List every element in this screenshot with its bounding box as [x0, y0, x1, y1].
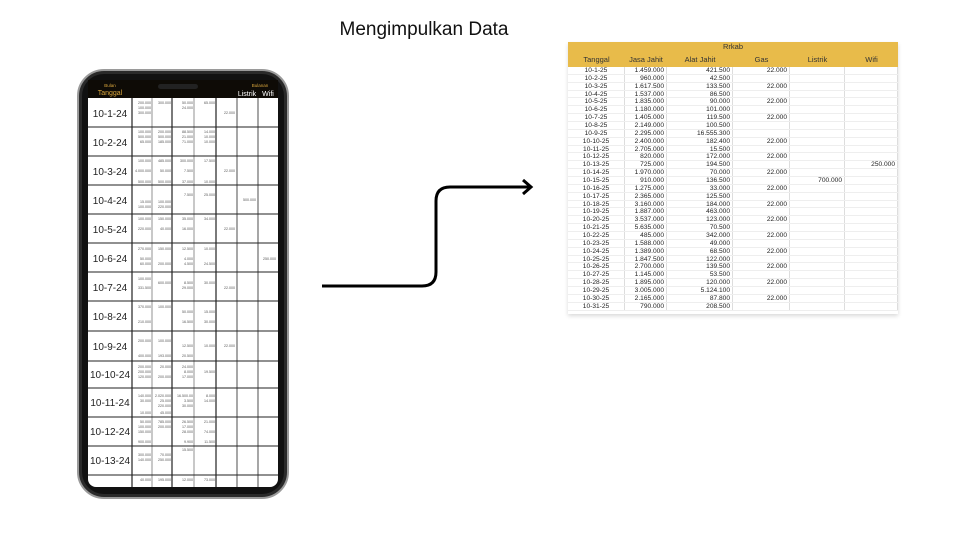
spreadsheet: Rrkab: 133.500: [706, 83, 730, 90]
spreadsheet: Rrkab: 123.000: [706, 216, 730, 223]
ledger amounts: 10.000: [204, 247, 215, 251]
ledger grid: [88, 98, 278, 487]
ledger amounts: 50.000: [140, 420, 151, 424]
ledger amounts: 22.000: [224, 286, 235, 290]
spreadsheet: Rrkab: 10-6-25: [585, 106, 607, 113]
spreadsheet: Rrkab: 10-25-25: [583, 256, 609, 262]
ledger amounts: 4.500: [184, 262, 193, 266]
ledger amounts: 71.000: [182, 140, 193, 144]
screen header: Bulan: [104, 83, 116, 88]
ledger amounts: 200.000: [158, 262, 171, 266]
spreadsheet: Rrkab: 2.149.000: [635, 122, 664, 129]
spreadsheet: Rrkab: Rrkab: [723, 42, 743, 51]
ledger amounts: 50.000: [140, 257, 151, 261]
spreadsheet: Rrkab: 10-12-25: [583, 153, 609, 160]
ledger amounts: 7.500: [184, 169, 193, 173]
ledger amounts: 785.000: [158, 420, 171, 424]
spreadsheet: Rrkab: 10-19-25: [583, 208, 609, 215]
ledger amounts: 300.000: [138, 453, 151, 457]
date labels: 10-5-24: [93, 225, 128, 236]
ledger amounts: 100.000: [138, 159, 151, 163]
spreadsheet: Rrkab: 463.000: [706, 208, 730, 215]
ledger amounts: 220.000: [158, 404, 171, 408]
ledger amounts: 7.500: [184, 193, 193, 197]
ledger amounts: 24.500: [204, 262, 215, 266]
ledger amounts: 16.000: [182, 227, 193, 231]
ledger amounts: 24.000: [182, 365, 193, 369]
ledger amounts: 485.000: [158, 159, 171, 163]
spreadsheet: Rrkab: 42.500: [710, 75, 730, 82]
ledger amounts: 17.500: [204, 159, 215, 163]
spreadsheet: Rrkab: 22.000: [767, 279, 787, 286]
spreadsheet: Rrkab: 10-26-25: [583, 263, 609, 270]
ledger amounts: 100.000: [158, 339, 171, 343]
spreadsheet: Rrkab: 820.000: [640, 153, 664, 160]
spreadsheet: Rrkab: 49.000: [710, 240, 730, 247]
spreadsheet: Rrkab: 22.000: [767, 201, 787, 207]
spreadsheet: Rrkab: 100.500: [706, 122, 730, 129]
spreadsheet: Rrkab: 1.389.000: [635, 248, 664, 255]
spreadsheet: Rrkab: 485.000: [640, 232, 664, 239]
screen header: [88, 80, 278, 98]
ledger amounts: 8.000: [184, 370, 193, 374]
ledger amounts: 45.000: [160, 411, 171, 415]
ledger amounts: 270.000: [138, 247, 151, 251]
ledger amounts: 193.000: [158, 354, 171, 358]
date labels: 10-12-24: [90, 427, 130, 438]
spreadsheet: Rrkab: Alat Jahit: [685, 55, 715, 64]
ledger amounts: 100.000: [138, 425, 151, 429]
spreadsheet: Rrkab: 10-20-25: [583, 216, 609, 223]
spreadsheet: Rrkab: 3.005.000: [635, 287, 664, 294]
spreadsheet: Rrkab: Gas: [755, 55, 768, 64]
ledger amounts: 3.500: [184, 399, 193, 403]
ledger amounts: 195.000: [158, 478, 171, 482]
spreadsheet: Rrkab: 22.000: [767, 232, 787, 239]
ledger amounts: 10.000: [204, 180, 215, 184]
spreadsheet: Rrkab: 22.000: [767, 153, 787, 160]
date labels: 10-4-24: [93, 196, 128, 207]
ledger amounts: 900.000: [138, 440, 151, 444]
spreadsheet: Rrkab: 10-21-25: [583, 224, 609, 231]
ledger amounts: 150.000: [158, 217, 171, 221]
ledger amounts: 24.000: [182, 106, 193, 110]
ledger amounts: 22.000: [224, 227, 235, 231]
ledger amounts: 73.000: [204, 478, 215, 482]
ledger amounts: 185.000: [158, 140, 171, 144]
spreadsheet: Rrkab: 10-1-25: [585, 67, 607, 74]
ledger amounts: 500.000: [243, 198, 256, 202]
screen header: Listrik: [238, 91, 257, 98]
spreadsheet: Rrkab: 1.617.500: [635, 83, 664, 90]
spreadsheet: Rrkab: 22.000: [767, 138, 787, 145]
ledger amounts: 14.000: [204, 399, 215, 403]
spreadsheet: Rrkab: 101.000: [706, 106, 730, 113]
ledger amounts: 14.000: [204, 130, 215, 134]
ledger amounts: 50.000: [182, 310, 193, 314]
ledger amounts: 10.000: [140, 411, 151, 415]
phone: handwritten ledger photo: [77, 69, 289, 499]
spreadsheet: Rrkab: 119.500: [707, 114, 730, 121]
ledger amounts: 140.000: [138, 394, 151, 398]
spreadsheet: Rrkab: 10-4-25: [585, 91, 607, 97]
ledger amounts: 100.000: [138, 130, 151, 134]
spreadsheet: Rrkab: 120.000: [706, 279, 730, 286]
spreadsheet: Rrkab: 1.895.000: [635, 279, 664, 286]
date labels: 10-7-24: [93, 283, 128, 294]
spreadsheet: Rrkab: 10-15-25: [583, 177, 609, 184]
ledger amounts: 200.000: [158, 375, 171, 379]
spreadsheet: Rrkab: 2.165.000: [635, 295, 664, 302]
ledger amounts: 30.000: [182, 404, 193, 408]
ledger amounts: 370.000: [138, 305, 151, 309]
ledger amounts: 25.000: [204, 193, 215, 197]
ledger amounts: 500.000: [158, 180, 171, 184]
spreadsheet: Rrkab: 3.160.000: [635, 201, 664, 207]
ledger amounts: 30.000: [204, 281, 215, 285]
ledger amounts: 20.500: [182, 354, 193, 358]
spreadsheet: Rrkab: 22.000: [767, 67, 787, 74]
ledger amounts: 30.000: [140, 399, 151, 403]
spreadsheet: Rrkab: 250.000: [871, 161, 895, 168]
spreadsheet: Rrkab: 22.000: [767, 248, 787, 255]
spreadsheet: Rrkab: 10-14-25: [583, 169, 609, 176]
date labels: 10-6-24: [93, 254, 128, 265]
ledger amounts: 88.500: [182, 130, 193, 134]
spreadsheet: Rrkab: 1.970.000: [635, 169, 664, 176]
ledger amounts: 28.000: [182, 430, 193, 434]
phone body: [78, 70, 288, 498]
ledger amounts: 30.000: [204, 320, 215, 324]
ledger amounts: 29.000: [182, 286, 193, 290]
ledger amounts: 210.000: [138, 320, 151, 324]
ledger amounts: 65.000: [140, 140, 151, 144]
spreadsheet: Rrkab: 10-8-25: [585, 122, 607, 129]
ledger amounts: 10.000: [204, 344, 215, 348]
spreadsheet: Rrkab: 10-10-25: [583, 138, 609, 145]
spreadsheet: Rrkab: 10-5-25: [585, 98, 607, 105]
ledger amounts: 300.000: [180, 159, 193, 163]
ledger amounts: 150.000: [138, 430, 151, 434]
spreadsheet: Rrkab: 3.537.000: [635, 216, 664, 223]
ledger amounts: 200.000: [138, 101, 151, 105]
spreadsheet: Rrkab: 33.000: [710, 185, 730, 192]
ledger amounts: 20.000: [160, 365, 171, 369]
ledger amounts: 60.000: [140, 262, 151, 266]
spreadsheet: Rrkab: 1.145.000: [635, 271, 664, 278]
date labels: 10-11-24: [90, 398, 130, 409]
spreadsheet: Rrkab: 421.500: [706, 67, 730, 74]
ledger amounts: 15.000: [204, 310, 215, 314]
spreadsheet: Rrkab: 70.500: [710, 224, 730, 231]
ledger amounts: 22.000: [224, 111, 235, 115]
spreadsheet: Rrkab: Wifi: [865, 55, 878, 64]
spreadsheet: Rrkab: 184.000: [706, 201, 730, 207]
spreadsheet: Rrkab: 700.000: [818, 177, 842, 184]
spreadsheet: Rrkab: 725.000: [640, 161, 664, 168]
date labels: 10-1-24: [93, 109, 128, 120]
ledger amounts: 200.000: [158, 130, 171, 134]
spreadsheet: Rrkab: 2.700.000: [635, 263, 664, 270]
spreadsheet: Rrkab: 1.588.000: [635, 240, 664, 247]
spreadsheet: Rrkab: 10-11-25: [583, 146, 609, 152]
ledger amounts: 26.500: [182, 420, 193, 424]
date labels: 10-13-24: [90, 456, 130, 467]
spreadsheet: Rrkab: 22.000: [767, 114, 787, 121]
ledger amounts: 12.500: [182, 344, 193, 348]
spreadsheet: Rrkab: 53.500: [710, 271, 730, 278]
ledger amounts: 40.000: [140, 478, 151, 482]
spreadsheet: Rrkab: 2.705.000: [635, 146, 664, 152]
spreadsheet: Rrkab: 16.555.300: [697, 130, 730, 137]
spreadsheet: Rrkab: 10-24-25: [583, 248, 609, 255]
date labels: 10-9-24: [93, 342, 128, 353]
ledger amounts: 17.000: [182, 375, 193, 379]
spreadsheet: Rrkab: 10-28-25: [583, 279, 609, 286]
spreadsheet: Rrkab: 10-9-25: [585, 130, 607, 137]
ledger amounts: 220.000: [158, 205, 171, 209]
spreadsheet: Rrkab: 90.000: [710, 98, 730, 105]
spreadsheet: Rrkab: 10-7-25: [585, 114, 607, 121]
spreadsheet: Rrkab: Tanggal: [583, 55, 610, 64]
ledger amounts: 50.000: [182, 101, 193, 105]
spreadsheet: Rrkab: 136.500: [706, 177, 730, 184]
spreadsheet: Rrkab: 910.000: [640, 177, 664, 184]
ledger amounts: 11.500: [204, 440, 215, 444]
ledger amounts: 19.500: [204, 370, 215, 374]
ledger amounts: 100.000: [158, 200, 171, 204]
spreadsheet: Rrkab: 22.000: [767, 263, 787, 270]
ledger amounts: 100.000: [138, 277, 151, 281]
spreadsheet: Rrkab: 1.887.000: [635, 208, 664, 215]
spreadsheet: Rrkab: 10-13-25: [583, 161, 609, 168]
spreadsheet: Rrkab: 10-17-25: [583, 193, 609, 200]
spreadsheet: Rrkab: 5.124.100: [701, 287, 730, 294]
spreadsheet: Rrkab: 22.000: [767, 83, 787, 90]
spreadsheet: Rrkab: 15.500: [710, 146, 730, 152]
screen header: Wifi: [262, 91, 274, 98]
ledger amounts: 120.000: [138, 375, 151, 379]
ledger amounts: 331.500: [138, 286, 151, 290]
spreadsheet: Rrkab: 22.000: [767, 216, 787, 223]
ledger amounts: 50.000: [160, 169, 171, 173]
ledger amounts: 21.000: [182, 135, 193, 139]
ledger amounts: 74.000: [204, 430, 215, 434]
ledger amounts: 150.000: [158, 247, 171, 251]
spreadsheet: Rrkab: 1.459.000: [635, 67, 664, 74]
ledger amounts: 15.000: [140, 200, 151, 204]
spreadsheet: Rrkab: 10-3-25: [585, 83, 607, 90]
spreadsheet: Rrkab: 342.000: [706, 232, 730, 239]
date labels: 10-3-24: [93, 167, 128, 178]
spreadsheet: Rrkab: 10-27-25: [583, 271, 609, 278]
ledger amounts: 17.000: [182, 425, 193, 429]
spreadsheet: Rrkab: 22.000: [767, 169, 787, 176]
spreadsheet: Rrkab: 122.000: [706, 256, 730, 262]
spreadsheet: Rrkab: 86.500: [710, 91, 730, 97]
spreadsheet: Rrkab: 2.400.000: [635, 138, 664, 145]
ledger amounts: 200.000: [138, 370, 151, 374]
ledger amounts: 16.500: [182, 320, 193, 324]
spreadsheet: Rrkab: 960.000: [640, 75, 664, 82]
ledger amounts: 22.000: [224, 169, 235, 173]
ledger amounts: 500.000: [158, 135, 171, 139]
ledger amounts: 300.000: [138, 111, 151, 115]
spreadsheet: Rrkab: 68.500: [710, 248, 730, 255]
spreadsheet: Rrkab: 1.835.000: [635, 98, 664, 105]
ledger amounts: 21.000: [204, 420, 215, 424]
spreadsheet: Rrkab: 10-31-25: [583, 303, 609, 310]
ledger amounts: 12.000: [182, 478, 193, 482]
ledger amounts: 22.000: [224, 344, 235, 348]
ledger amounts: 400.000: [138, 354, 151, 358]
ledger amounts: 9.900: [184, 440, 193, 444]
date labels: 10-8-24: [93, 312, 128, 323]
spreadsheet: Rrkab: 10-22-25: [583, 232, 609, 239]
ledger amounts: 8.500: [184, 281, 193, 285]
spreadsheet: Rrkab: 10-2-25: [585, 75, 607, 82]
ledger amounts: 10.000: [204, 135, 215, 139]
spreadsheet: Rrkab: 10-23-25: [583, 240, 609, 247]
ledger amounts: 500.000: [138, 135, 151, 139]
spreadsheet: Rrkab: 172.000: [706, 153, 730, 160]
ledger amounts: 220.000: [138, 227, 151, 231]
spreadsheet: Rrkab: 1.275.000: [635, 185, 664, 192]
spreadsheet: Rrkab: 22.000: [767, 98, 787, 105]
ledger amounts: 100.000: [138, 205, 151, 209]
ledger amounts: 70.000: [160, 453, 171, 457]
spreadsheet: Rrkab: 2.295.000: [635, 130, 664, 137]
date labels: [90, 109, 130, 467]
spreadsheet: Rrkab: 1.180.000: [635, 106, 664, 113]
date labels: 10-2-24: [93, 138, 128, 149]
spreadsheet: Rrkab: 1.537.000: [635, 91, 664, 97]
ledger amounts: 500.000: [138, 180, 151, 184]
ledger amounts: 200.000: [158, 425, 171, 429]
ledger amounts: [135, 101, 276, 482]
ledger amounts: 37.000: [182, 180, 193, 184]
spreadsheet: Rrkab: 22.000: [767, 295, 787, 302]
ledger amounts: 15.500: [182, 448, 193, 452]
screen header: Tanggal: [98, 90, 123, 97]
spreadsheet: Rrkab: 2.365.000: [635, 193, 664, 200]
ledger amounts: 4.000: [184, 257, 193, 261]
spreadsheet: Rrkab: 70.000: [710, 169, 730, 176]
spreadsheet: Rrkab: 22.000: [767, 185, 787, 192]
spreadsheet: Rrkab: Listrik: [808, 55, 827, 64]
spreadsheet: Rrkab: [568, 42, 898, 314]
spreadsheet: Rrkab: 87.800: [710, 295, 730, 302]
spreadsheet: Rrkab: 10-30-25: [583, 295, 609, 302]
spreadsheet: Rrkab: 10-18-25: [583, 201, 609, 207]
spreadsheet: Rrkab: 790.000: [640, 303, 664, 310]
ledger amounts: 200.000: [138, 339, 151, 343]
arrow: [322, 178, 534, 288]
spreadsheet: Rrkab: 208.500: [706, 303, 730, 310]
ledger amounts: 40.000: [160, 227, 171, 231]
spreadsheet: Rrkab: 182.400: [706, 138, 730, 145]
spreadsheet: Rrkab: 10-29-25: [583, 287, 609, 294]
ledger amounts: 35.000: [182, 217, 193, 221]
spreadsheet: Rrkab: 194.500: [706, 161, 730, 168]
screen header: Bulanan: [252, 83, 269, 88]
ledger amounts: 25.000: [160, 399, 171, 403]
ledger amounts: 34.000: [204, 217, 215, 221]
ledger amounts: 100.000: [138, 217, 151, 221]
spreadsheet: Rrkab: 10-16-25: [583, 185, 609, 192]
spreadsheet: Rrkab: Jasa Jahit: [629, 55, 663, 64]
ledger amounts: 250.000: [158, 458, 171, 462]
ledger amounts: 200.000: [138, 365, 151, 369]
ledger amounts: 250.000: [263, 257, 276, 261]
ledger amounts: 12.500: [182, 247, 193, 251]
spreadsheet: Rrkab: 1.405.000: [635, 114, 664, 121]
ledger amounts: 100.000: [138, 106, 151, 110]
spreadsheet: Rrkab: 125.500: [706, 193, 730, 200]
spreadsheet: Rrkab: 139.500: [706, 263, 730, 270]
ledger amounts: 65.000: [204, 101, 215, 105]
ledger amounts: 4.000.000: [135, 169, 151, 173]
title: Mengimpulkan Data: [340, 19, 508, 40]
date labels: 10-10-24: [90, 370, 130, 381]
ledger amounts: 600.000: [158, 281, 171, 285]
spreadsheet: Rrkab: 5.635.000: [635, 224, 664, 231]
ledger amounts: 300.000: [158, 101, 171, 105]
ledger amounts: 16.500.00: [177, 394, 193, 398]
ledger amounts: 100.000: [158, 305, 171, 309]
ledger amounts: 10.000: [204, 140, 215, 144]
ledger amounts: 2.020.000: [155, 394, 171, 398]
ledger amounts: 8.000: [206, 394, 215, 398]
ledger amounts: 140.000: [138, 458, 151, 462]
spreadsheet: Rrkab: 1.847.500: [635, 256, 664, 262]
